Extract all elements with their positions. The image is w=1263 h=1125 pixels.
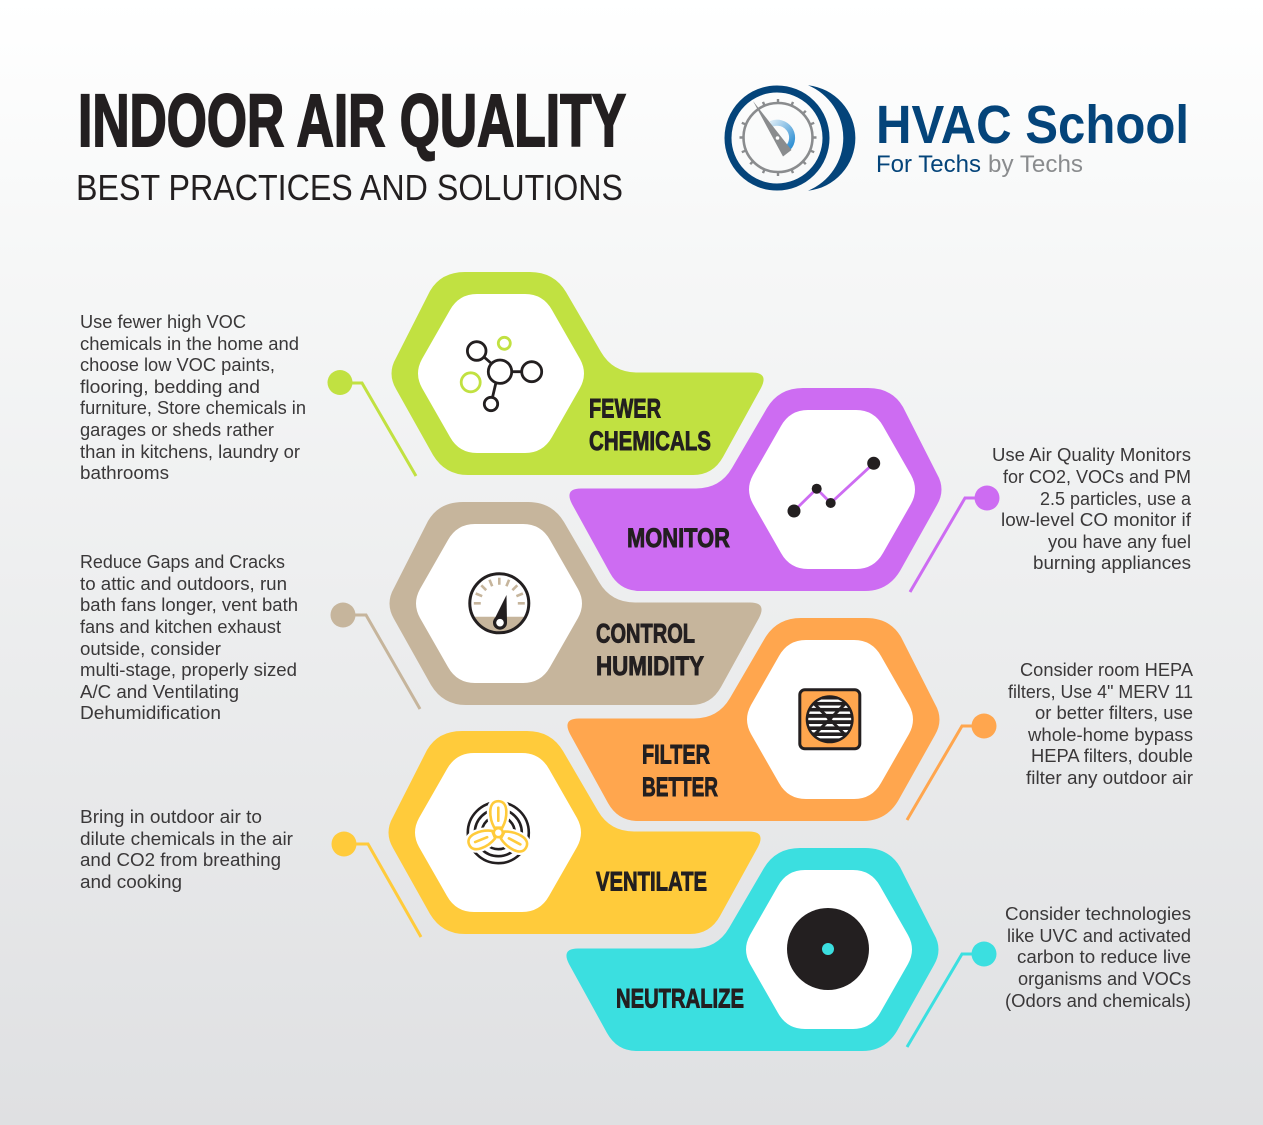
text block: filter better: HEPA filters, double <box>1031 746 1193 766</box>
text block: filter better: filter any outdoor air <box>1026 768 1193 788</box>
text block: monitor: for CO2, VOCs and PM <box>1003 467 1191 487</box>
connector: fewer chemicals <box>328 370 416 476</box>
icon: line chart <box>788 457 880 518</box>
white hexagon <box>415 753 581 912</box>
logo icon: gauge <box>728 85 855 191</box>
text block: control humidity: bath fans longer, vent bath <box>80 595 298 615</box>
text block: ventilate: and CO2 from breathing <box>80 850 281 870</box>
icon: fan <box>466 801 530 863</box>
text block: monitor <box>992 445 1192 573</box>
text block: monitor: 2.5 particles, use a <box>1040 489 1192 509</box>
text block: fewer chemicals: garages or sheds rather <box>80 420 274 440</box>
text block: fewer chemicals: Use fewer high VOC <box>80 312 246 332</box>
logo tagline: For Techs <box>876 151 981 178</box>
text block: fewer chemicals: choose low VOC paints, <box>80 355 275 375</box>
text block: monitor: burning appliances <box>1033 553 1191 573</box>
panel: control humidity <box>390 502 762 705</box>
heading: MONITOR <box>627 523 730 553</box>
connector: ventilate <box>332 832 421 937</box>
text block: filter better: whole-home bypass <box>1027 725 1193 745</box>
text block: fewer chemicals: flooring, bedding and <box>80 377 260 397</box>
subtitle: BEST PRACTICES AND SOLUTIONS <box>76 167 623 208</box>
title: INDOOR AIR QUALITY <box>78 79 626 162</box>
heading <box>596 618 704 681</box>
hexagon shape <box>566 848 938 1051</box>
panel: monitor <box>569 388 942 591</box>
hexagon shape <box>390 502 762 705</box>
white hexagon <box>747 640 913 799</box>
text block: neutralize: organisms and VOCs <box>1018 969 1191 989</box>
white hexagon <box>749 410 915 569</box>
logo wordmark: HVAC School <box>876 95 1189 155</box>
heading <box>589 394 711 456</box>
text block: ventilate: Bring in outdoor air to <box>80 807 262 827</box>
panel: ventilate <box>388 731 761 934</box>
heading: VENTILATE <box>596 866 707 896</box>
text block: control humidity <box>80 552 298 723</box>
white hexagon <box>746 870 912 1029</box>
hexagon shape <box>569 388 942 591</box>
text block: neutralize <box>1005 904 1191 1011</box>
hexagon shape <box>388 731 761 934</box>
hexagon shape <box>567 618 940 821</box>
icon: neutralize disc <box>787 908 869 990</box>
text block: neutralize: carbon to reduce live <box>1017 947 1191 967</box>
text block: ventilate: dilute chemicals in the air <box>80 829 293 849</box>
text block: filter better <box>1008 660 1194 788</box>
connector: neutralize <box>907 942 996 1047</box>
heading: CONTROL <box>596 618 695 648</box>
panel: fewer chemicals <box>392 272 764 475</box>
text block: monitor: you have any fuel <box>1048 532 1191 552</box>
hexagon shape <box>392 272 764 475</box>
text block: control humidity: multi-stage, properly sized <box>80 660 297 680</box>
text block: ventilate <box>80 807 293 892</box>
text block: monitor: low-level CO monitor if <box>1001 510 1192 530</box>
icon: air filter <box>800 690 860 749</box>
heading: NEUTRALIZE <box>616 984 744 1014</box>
icon: humidity gauge <box>470 574 529 633</box>
text block: control humidity: fans and kitchen exhaust <box>80 617 281 637</box>
connector: filter better <box>907 714 996 820</box>
text block: fewer chemicals: than in kitchens, laundry or <box>80 442 300 462</box>
connector: monitor <box>910 486 1000 592</box>
panel: filter better <box>567 618 940 821</box>
text block: control humidity: Reduce Gaps and Cracks <box>80 552 285 572</box>
text block: control humidity: outside, consider <box>80 639 221 659</box>
text block: control humidity: Dehumidification <box>80 703 221 723</box>
heading: CHEMICALS <box>589 426 711 456</box>
text block: filter better: or better filters, use <box>1035 703 1193 723</box>
text block: fewer chemicals: chemicals in the home and <box>80 334 299 354</box>
heading: FILTER <box>642 740 710 770</box>
text block: fewer chemicals <box>80 312 306 483</box>
text block: neutralize: (Odors and chemicals) <box>1005 991 1191 1011</box>
heading: FEWER <box>589 394 661 424</box>
text block: filter better: Consider room HEPA <box>1020 660 1194 680</box>
text block: fewer chemicals: bathrooms <box>80 463 169 483</box>
text block: neutralize: Consider technologies <box>1005 904 1191 924</box>
heading: BETTER <box>642 772 718 802</box>
text block: monitor: Use Air Quality Monitors <box>992 445 1191 465</box>
text block: control humidity: A/C and Ventilating <box>80 682 239 702</box>
logo tagline: by Techs <box>988 151 1083 178</box>
text block: neutralize: like UVC and activated <box>1007 926 1191 946</box>
icon: molecule <box>461 337 542 411</box>
white hexagon <box>416 524 582 683</box>
text block: ventilate: and cooking <box>80 872 182 892</box>
heading <box>642 740 718 802</box>
white hexagon <box>418 294 584 453</box>
connector: control humidity <box>330 602 420 709</box>
logo: HVAC School <box>728 85 1189 191</box>
panel: neutralize <box>566 848 938 1051</box>
text block: filter better: filters, Use 4" MERV 11 <box>1008 682 1193 702</box>
text block: fewer chemicals: furniture, Store chemicals in <box>80 398 306 418</box>
heading: HUMIDITY <box>596 651 704 681</box>
text block: control humidity: to attic and outdoors, run <box>80 574 287 594</box>
